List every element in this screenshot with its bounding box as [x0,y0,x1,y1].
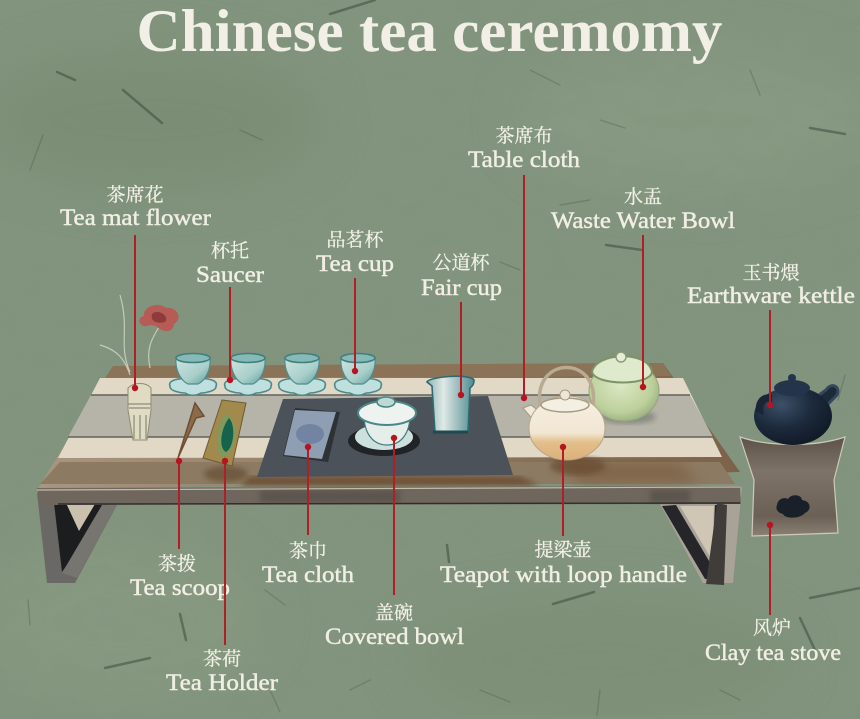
label: saucer: Saucer [196,262,264,287]
label: tea cloth [262,444,355,587]
label: tea holder: Tea Holder [166,670,278,695]
label: tea cloth: Tea cloth [262,562,355,587]
label: teapot with loop handle: Teapot with loop handle [440,562,687,587]
table cloth runner [58,378,722,458]
items: four cups on saucers [170,354,381,395]
item: tea holder [203,400,248,482]
label: tea scoop: Tea scoop [130,575,230,600]
label: tea mat flower: 茶席花 [106,184,164,206]
label: clay tea stove: Clay tea stove [705,640,841,665]
label: earthware kettle [687,262,855,408]
label: clay tea stove: 风炉 [753,617,791,639]
table right leg [660,487,742,585]
table front edge [37,486,741,505]
kettle [754,374,838,445]
label: clay tea stove [705,522,841,665]
item: waste water bowl [589,352,659,424]
label: table cloth: 茶席布 [495,125,553,147]
table left leg [37,493,118,583]
label: tea holder [166,458,278,695]
label: tea cup: Tea cup [316,251,394,276]
label: earthware kettle: 玉书煨 [742,262,800,284]
label: tea scoop: 茶拨 [158,553,196,575]
item: tea cloth [283,408,340,462]
label: fair cup: 公道杯 [432,252,490,274]
label: fair cup: Fair cup [421,275,502,300]
label: teapot with loop handle: 提梁壶 [534,539,592,561]
item: tea mat flower vase [100,295,179,440]
item: covered bowl [348,397,420,456]
table top [37,363,740,490]
label: table cloth [468,125,581,401]
label: tea cup: 品茗杯 [326,229,384,251]
label: tea cup [316,229,394,374]
item: fair cup [427,376,474,432]
label: tea scoop [130,458,230,600]
label: table cloth: Table cloth [468,147,581,172]
label: saucer [196,240,264,383]
label: waste water bowl: 水盂 [624,186,662,208]
label: saucer: 杯托 [211,240,249,262]
item: teapot with loop handle [523,368,606,475]
label: covered bowl: Covered bowl [325,624,464,649]
item: tea scoop [178,403,204,458]
illustration: tea table [37,295,845,585]
label: teapot with loop handle [440,444,687,587]
label: earthware kettle: Earthware kettle [687,283,855,308]
label: tea mat flower: Tea mat flower [60,205,211,230]
label: tea mat flower [60,184,211,391]
label: covered bowl: 盖碗 [375,602,413,624]
label: tea holder: 茶荷 [203,648,241,670]
label: fair cup [421,252,502,398]
label: covered bowl [325,435,464,649]
label: waste water bowl [551,186,735,390]
tray: dark slate [257,396,513,477]
label: waste water bowl: Waste Water Bowl [551,208,735,233]
label: tea cloth: 茶巾 [289,540,327,562]
stove [740,437,845,536]
